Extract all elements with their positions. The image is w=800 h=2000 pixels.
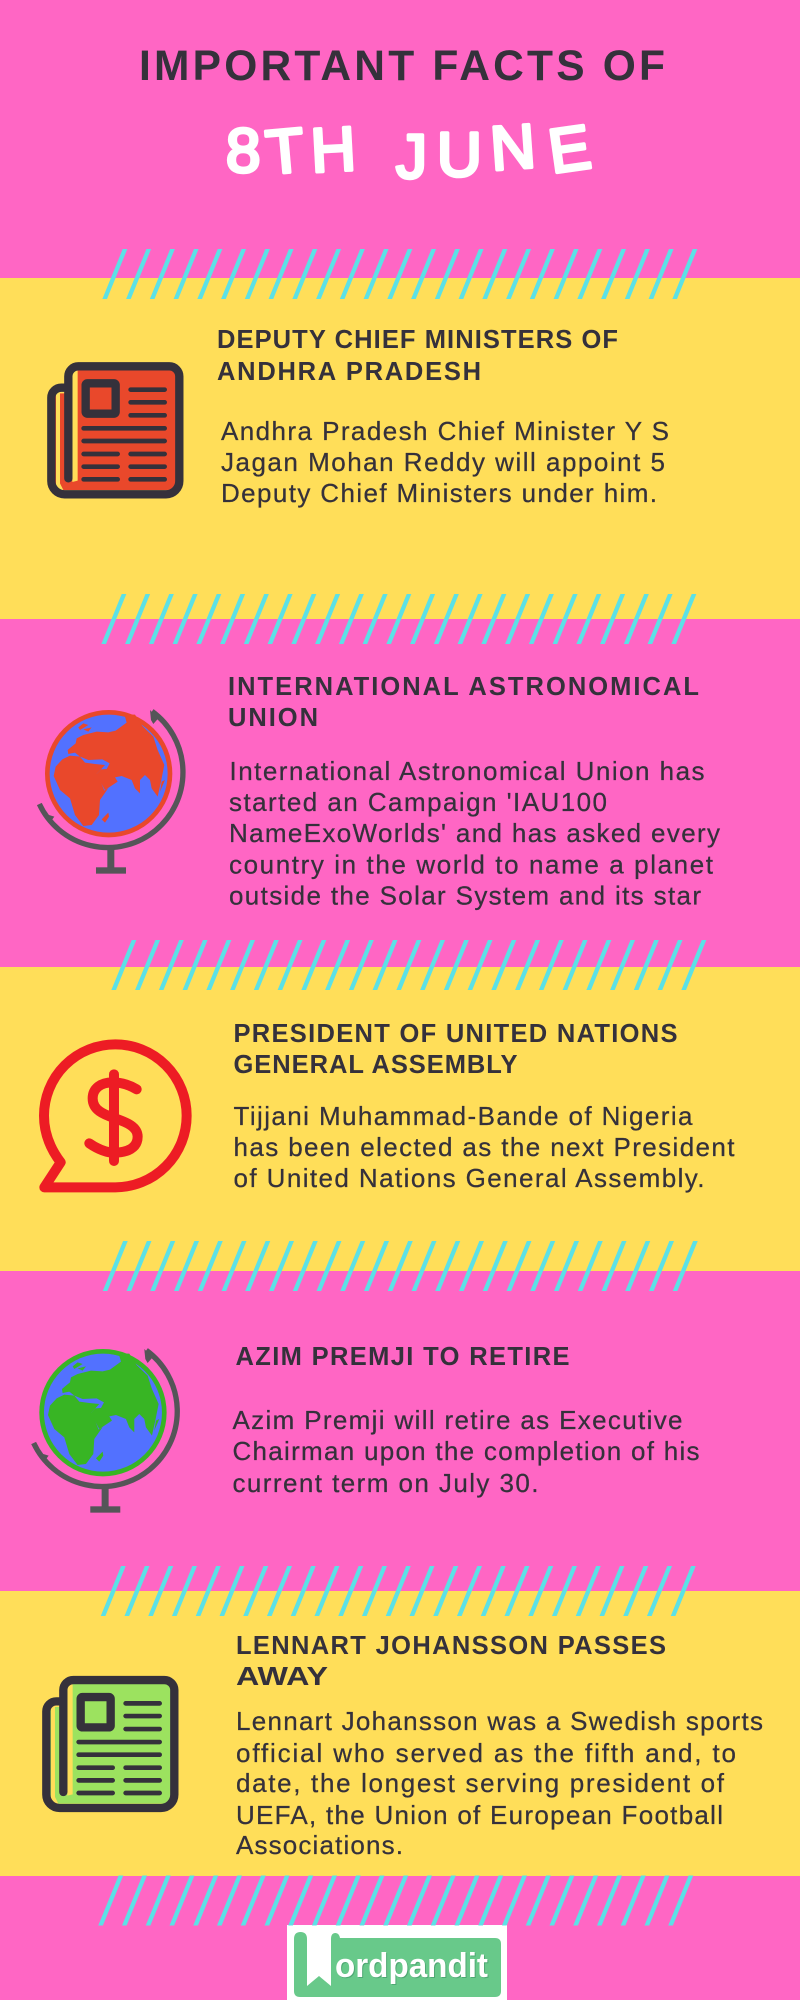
heading: international astronomical union: INTERNATIONAL ASTRONOMICAL: [228, 673, 699, 701]
heading: lennart johansson: AWAY: [236, 1663, 328, 1691]
heading: president of un general assembly: GENERAL ASSEMBLY: [234, 1051, 518, 1079]
text: astronomical union body: started an Campaign 'IAU100: [229, 787, 607, 817]
heading: deputy chief ministers: DEPUTY CHIEF MINISTERS OF: [217, 326, 618, 354]
heading: president of un general assembly: PRESIDENT OF UNITED NATIONS: [234, 1020, 678, 1048]
text: deputy chief ministers body: Jagan Mohan Reddy will appoint 5: [221, 447, 665, 477]
text: president body: has been elected as the next President: [234, 1132, 735, 1162]
panel: president of un general assembly: [0, 967, 800, 1271]
text: azim premji body: current term on July 30.: [232, 1468, 538, 1498]
text: deputy chief ministers body: [221, 416, 669, 508]
heading: lennart johansson: LENNART JOHANSSON PASSES: [236, 1632, 666, 1660]
heading: azim premji: AZIM PREMJI TO RETIRE: [236, 1343, 570, 1371]
text: azim premji body: Chairman upon the completion of his: [232, 1436, 700, 1466]
panel: international astronomical union: [0, 619, 800, 967]
heading: deputy chief ministers: [217, 326, 618, 386]
text: deputy chief ministers body: Deputy Chief Ministers under him.: [221, 478, 657, 508]
text: president body: Tijjani Muhammad-Bande of Nigeria: [234, 1101, 693, 1131]
text: deputy chief ministers body: Andhra Pradesh Chief Minister Y S: [221, 416, 669, 446]
panel: lennart johansson: [0, 1591, 800, 1876]
text: lennart johansson body: official who served as the fifth and, to: [236, 1738, 736, 1768]
heading: international astronomical union: [228, 673, 699, 732]
text: astronomical union body: NameExoWorlds' and has asked every: [229, 818, 720, 848]
text: azim premji body: Azim Premji will retire as Executive: [232, 1405, 682, 1435]
text: lennart johansson body: Associations.: [236, 1830, 403, 1860]
text: astronomical union body: International Astronomical Union has: [230, 756, 704, 786]
panel: header: [0, 0, 800, 278]
icon: dollar speech bubble: [44, 1044, 187, 1187]
title: date: 8TH JUNE: [226, 112, 595, 192]
heading: president of un general assembly: [234, 1020, 678, 1079]
text: president body: [234, 1101, 735, 1193]
text: lennart johansson body: date, the longest serving president of: [236, 1768, 725, 1798]
text: lennart johansson body: [236, 1706, 763, 1860]
title: important facts of: IMPORTANT FACTS OF: [139, 43, 665, 90]
text: astronomical union body: outside the Solar System and its star: [229, 880, 701, 910]
text: astronomical union body: country in the world to name a planet: [229, 850, 714, 880]
heading: international astronomical union: UNION: [228, 704, 318, 732]
heading: lennart johansson: [236, 1632, 666, 1691]
text: president body: of United Nations General Assembly.: [234, 1163, 704, 1193]
panel: footer: [0, 1876, 800, 2000]
icon: globe green: [34, 1349, 177, 1513]
logo: wordpandit: [287, 1925, 507, 2000]
text: astronomical union body: [229, 756, 720, 910]
panel: deputy chief ministers: [0, 278, 800, 619]
icon: newspaper green: [46, 1680, 174, 1808]
icon: newspaper red: [51, 366, 179, 494]
logo: wordpandit: ordpandit: [335, 1947, 488, 1985]
text: lennart johansson body: UEFA, the Union of European Football: [236, 1800, 723, 1830]
text: lennart johansson body: Lennart Johansson was a Swedish sports: [236, 1706, 763, 1736]
panel: azim premji: [0, 1271, 800, 1591]
heading: deputy chief ministers: ANDHRA PRADESH: [217, 358, 481, 386]
icon: globe red: [39, 710, 183, 874]
text: azim premji body: [232, 1405, 700, 1498]
